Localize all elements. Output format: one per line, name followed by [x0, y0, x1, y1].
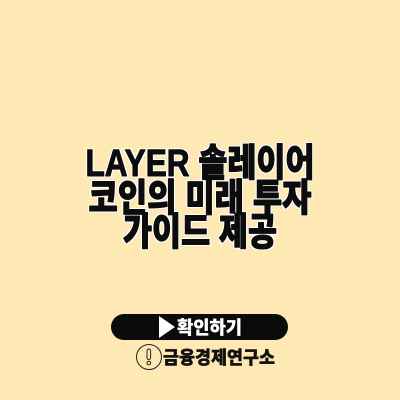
brand: 금융경제연구소: 금융경제연구소	[163, 348, 275, 368]
button: confirm	[111, 314, 288, 340]
title: LAYER 솔레이어	[86, 143, 314, 185]
title: 코인의 미래 투자	[88, 178, 312, 220]
brand: 금융경제연구소	[136, 344, 275, 370]
button: confirm: 확인하기	[177, 317, 242, 338]
icon: exclamation circle	[136, 344, 162, 370]
title: 가이드 제공	[123, 212, 277, 254]
title	[86, 143, 314, 254]
